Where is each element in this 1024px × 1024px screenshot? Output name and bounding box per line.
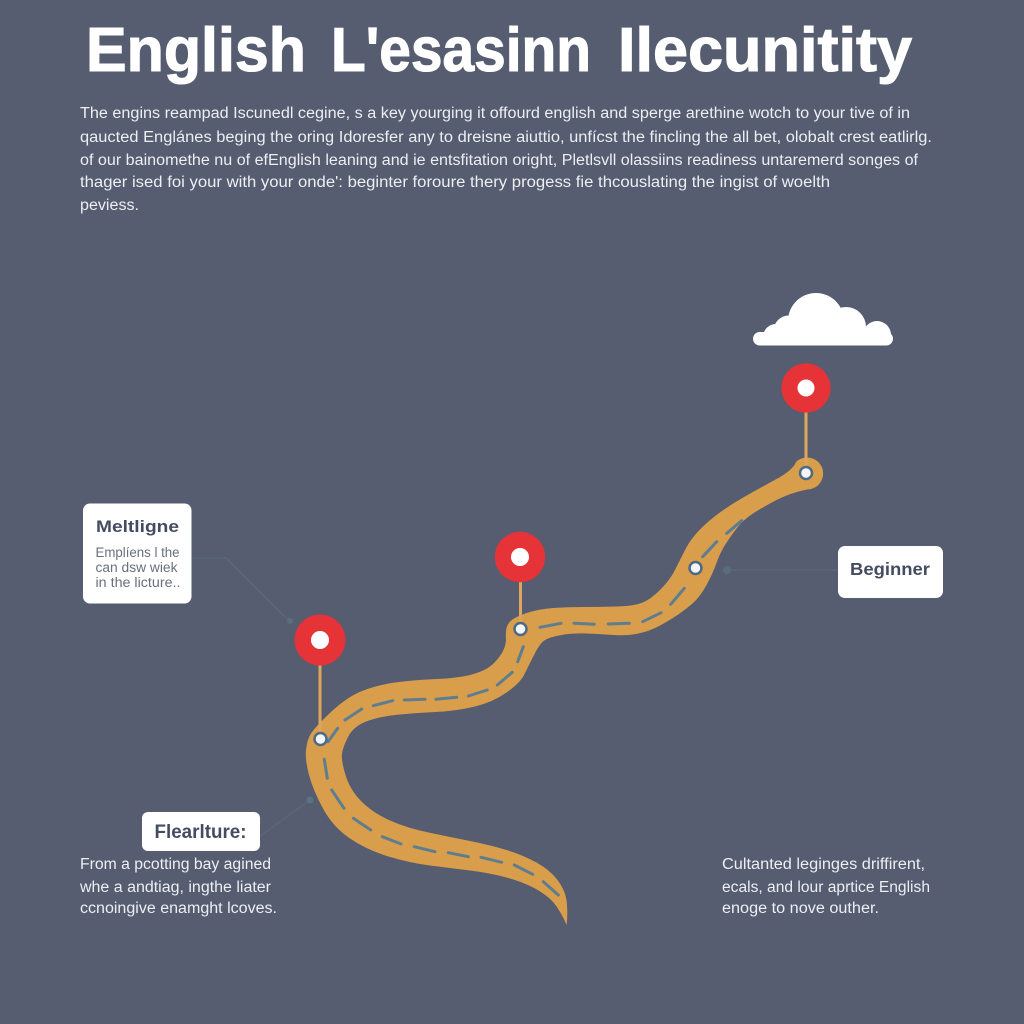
road marker node [690,562,702,574]
text block: lower right: enoge to nove outher. [722,900,879,917]
connector: Flearlture card to road [260,796,314,836]
winding road path [306,458,823,925]
icon: cloud [753,293,893,350]
title: Ilecunitity [618,16,913,85]
title [86,16,913,85]
infographic canvas [80,26,943,925]
card: Meltligne: in the licture.. [96,575,180,590]
pin 2 [495,532,545,635]
intro text block: of our bainomethe nu of efEnglish leaning and ie entsfitation oright, Pletlsvll olassiins readiness untaremerd songes of [80,152,919,169]
intro text block: peviess. [80,197,139,214]
card: Beginner [838,546,943,598]
text block: lower left [79,856,277,917]
text block: lower right: ecals, and lour aprtice English [722,879,930,896]
text block: lower left: whe a andtiag, ingthe liater [79,879,271,896]
intro text block: thager ised foi your with your onde': beginter foroure thery progess fie thcouslating the ingist of woelth [80,174,830,191]
intro text block: qaucted Englánes beging the oring Idoresfer any to dreisne aiuttio, unfícst the fincling the all bet, olobalt crest eatlirlg. [80,129,932,146]
pin 3 [781,363,831,479]
road centre dashes [324,521,742,895]
card: Flearlture [142,812,260,851]
card: Meltligne [83,504,192,604]
card: Meltligne: can dsw wiek [96,560,178,575]
card: Beginner: Beginner [850,559,930,579]
text block: lower right: Cultanted leginges driffirent, [722,856,925,873]
connector: Meltligne card to first pin [192,558,293,624]
text block: lower right [722,856,930,917]
card: Flearlture: Flearlture: [154,822,246,843]
card: Meltligne: Meltligne [96,517,179,536]
text block: lower left: From a pcotting bay agined [80,856,271,873]
text block: lower left: ccnoingive enamght lcoves. [80,900,277,917]
intro text block [80,105,932,214]
connector: Beginner card to road [723,566,838,574]
pin 1 [294,614,346,745]
card: Meltligne: Emplíens l the [96,545,180,560]
title: L'esasinn [331,16,591,85]
title: English [86,16,306,85]
intro text block: The engins reampad Iscunedl cegine, s a key yourging it offourd english and sperge arethine wotch to your tive of in [80,105,910,122]
road surface [306,458,823,925]
